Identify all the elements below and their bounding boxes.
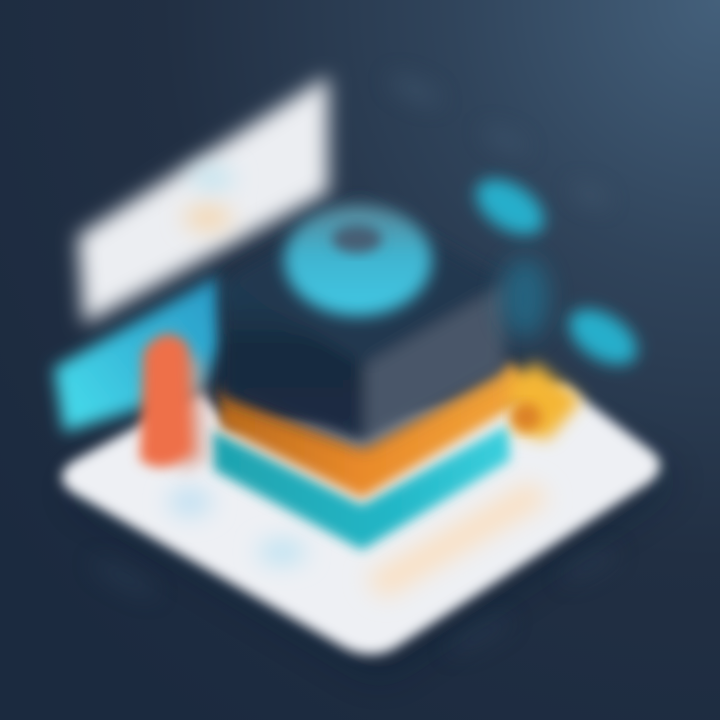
dark cube [222, 200, 508, 448]
cyan ring on cube [284, 204, 432, 316]
teal layer [212, 425, 510, 550]
cyan side panel [54, 276, 222, 432]
rear white panel [78, 76, 328, 324]
faint background marks [90, 71, 622, 658]
orange cylinder [140, 334, 207, 472]
floating cyan chip top [466, 168, 554, 246]
white base platform [62, 340, 675, 675]
orange cube accent [510, 362, 582, 440]
floating teal chip middle [501, 258, 549, 338]
base tint marks [168, 482, 550, 598]
orange layer [220, 362, 538, 498]
panel chart marks [184, 168, 234, 229]
floating cyan chip bottom [559, 298, 647, 376]
